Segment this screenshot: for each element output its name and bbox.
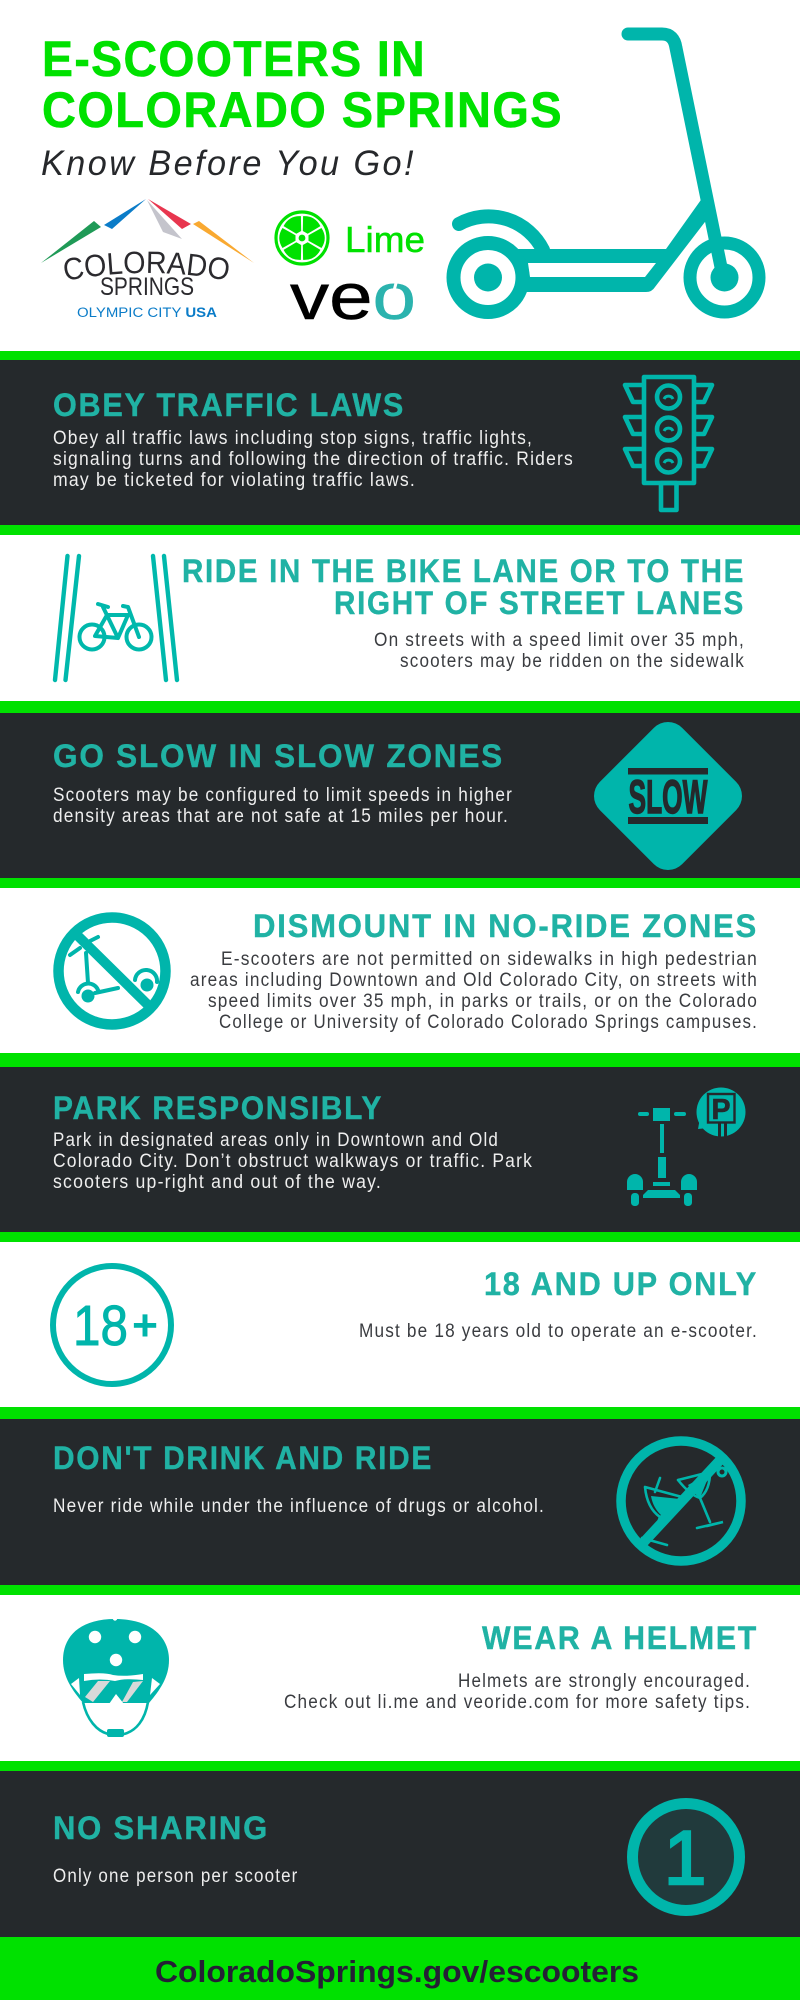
panel: 18 and up only: [0, 1242, 800, 1407]
logo: Colorado Springs: SPRINGS: [100, 273, 194, 301]
header panel: [41, 28, 766, 333]
body text: Obey all traffic laws including stop signs, traffic lights,: [53, 428, 533, 449]
panel: dismount in no-ride zones: [0, 888, 800, 1053]
body text: Helmets are strongly encouraged.: [458, 1671, 751, 1692]
icon: scooter: [454, 34, 759, 312]
panel: ride in the bike lane: [0, 535, 800, 701]
icon: one rider: 1: [664, 1816, 706, 1901]
icon: parked scooter: [627, 1108, 697, 1206]
icon: parking bubble: P: [712, 1094, 730, 1126]
icon: no scooter: [58, 918, 166, 1024]
logo: Lime: [276, 212, 425, 264]
panel: go slow in slow zones: [0, 713, 800, 878]
heading: GO SLOW IN SLOW ZONES: [53, 738, 504, 774]
icon: helmet: [63, 1616, 169, 1737]
icon: bike lane: [55, 556, 177, 680]
body text: Must be 18 years old to operate an e-scooter.: [359, 1321, 758, 1342]
heading: OBEY TRAFFIC LAWS: [53, 387, 405, 423]
logo: Colorado Springs: COLORADO: [64, 252, 229, 280]
icon: slow sign: SLOW: [628, 770, 708, 823]
body text: areas including Downtown and Old Colorado City, on streets with: [190, 970, 758, 991]
footer: ColoradoSprings.gov/escooters: [155, 1954, 639, 1989]
body text: [284, 1671, 751, 1713]
heading: RIDE IN THE BIKE LANE OR TO THE: [182, 553, 745, 589]
subtitle: Know Before You Go!: [41, 144, 416, 183]
body text: Only one person per scooter: [53, 1866, 298, 1887]
icon: traffic light: [625, 377, 712, 510]
body text: speed limits over 35 mph, in parks or trails, or on the Colorado: [208, 991, 758, 1012]
logo: Colorado Springs: OLYMPIC CITY USA: [77, 305, 217, 320]
body text: density areas that are not safe at 15 miles per hour.: [53, 806, 509, 827]
title: E-SCOOTERS IN: [42, 31, 426, 87]
body text: [190, 949, 758, 1033]
logo: Colorado Springs: [41, 199, 254, 320]
body text: Never ride while under the influence of drugs or alcohol.: [53, 1496, 545, 1517]
icon: 18 plus: [53, 1266, 171, 1384]
body text: [53, 785, 513, 827]
heading: 18 AND UP ONLY: [484, 1266, 758, 1302]
body text: Park in designated areas only in Downtown and Old: [53, 1130, 499, 1151]
body text: Check out li.me and veoride.com for more safety tips.: [284, 1692, 751, 1713]
panel: don't drink and ride: [0, 1419, 800, 1585]
heading: WEAR A HELMET: [482, 1620, 758, 1656]
icon: 18 plus: +: [132, 1301, 158, 1350]
panel: park responsibly: [0, 1067, 800, 1232]
body text: E-scooters are not permitted on sidewalks in high pedestrian: [221, 949, 758, 970]
heading: NO SHARING: [53, 1810, 269, 1846]
heading: RIGHT OF STREET LANES: [334, 585, 745, 621]
body text: signaling turns and following the direction of traffic. Riders: [53, 449, 574, 470]
body text: [53, 1130, 533, 1193]
icon: no drinking: [621, 1441, 741, 1561]
logo: Lime: Lime: [345, 219, 425, 260]
logo: Veo: veo: [290, 260, 416, 333]
panel: obey traffic laws: [0, 360, 800, 525]
body text: On streets with a speed limit over 35 mph,: [374, 630, 745, 651]
heading: [182, 553, 745, 621]
title: [42, 31, 563, 138]
body text: may be ticketed for violating traffic laws.: [53, 470, 416, 491]
body text: Colorado City. Don’t obstruct walkways or traffic. Park: [53, 1151, 533, 1172]
title: COLORADO SPRINGS: [42, 82, 563, 138]
heading: PARK RESPONSIBLY: [53, 1090, 383, 1126]
icon: one rider: [632, 1804, 740, 1910]
body text: [374, 630, 745, 672]
body text: scooters may be ridden on the sidewalk: [400, 651, 745, 672]
heading: DISMOUNT IN NO-RIDE ZONES: [253, 908, 758, 944]
heading: DON'T DRINK AND RIDE: [53, 1440, 433, 1476]
body text: scooters up-right and out of the way.: [53, 1172, 382, 1193]
icon: parking bubble: [696, 1088, 746, 1138]
footer: [0, 1937, 800, 2000]
panel: no sharing: [0, 1771, 800, 1937]
body text: [53, 428, 574, 491]
icon: 18 plus: 18: [73, 1294, 128, 1358]
icon: slow sign: [614, 742, 722, 850]
panel: wear a helmet: [0, 1595, 800, 1761]
body text: Scooters may be configured to limit speeds in higher: [53, 785, 513, 806]
